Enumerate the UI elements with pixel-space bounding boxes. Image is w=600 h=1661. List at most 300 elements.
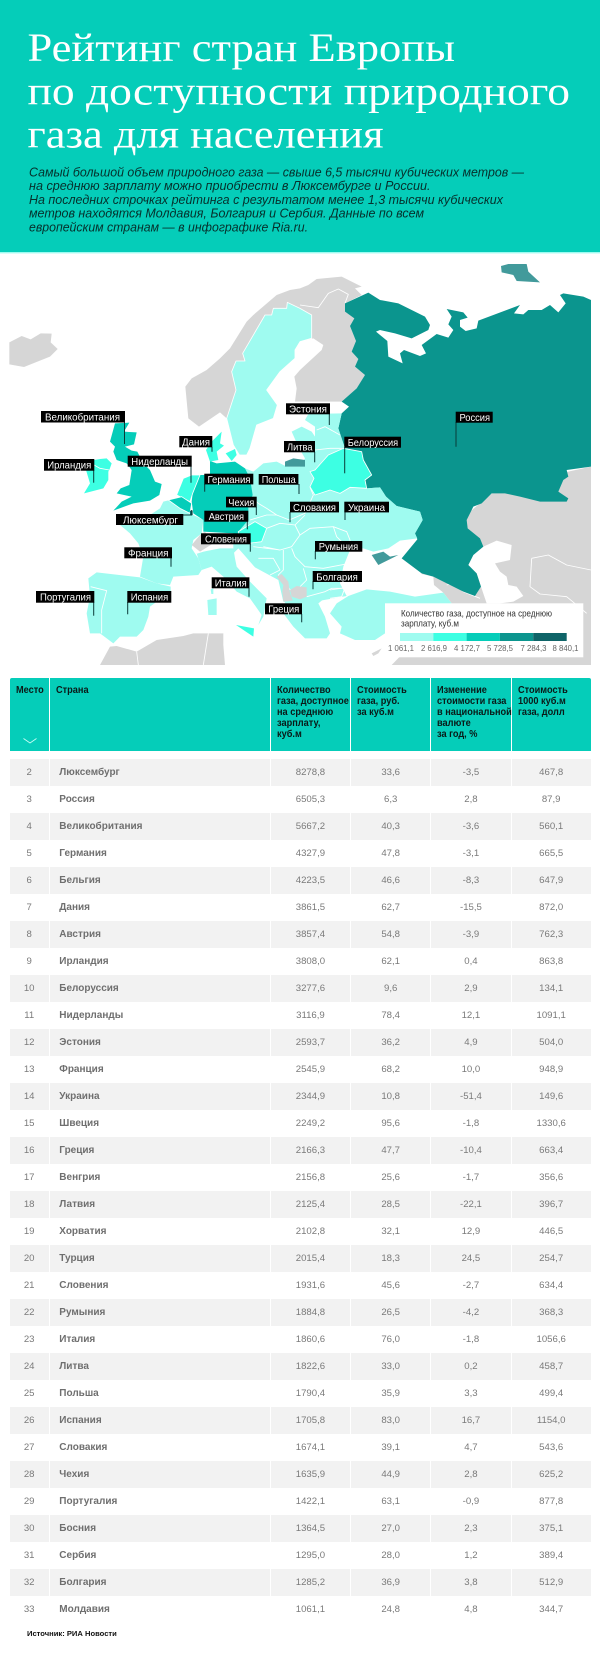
- row: Люксембург: -3,5: [463, 767, 479, 778]
- row: Португалия: 877,8: [539, 1496, 563, 1507]
- row: Ирландия: 0,4: [464, 956, 478, 967]
- row: Молдавия: 33: [24, 1604, 35, 1615]
- row: Швеция: -1,8: [463, 1118, 479, 1129]
- table header: Страна: [56, 684, 88, 696]
- row: Италия: Италия: [59, 1334, 95, 1345]
- row: Россия: 3: [27, 794, 32, 805]
- intro text: [29, 165, 525, 234]
- row: Сербия: 389,4: [539, 1550, 563, 1561]
- row: Сербия: Сербия: [59, 1550, 96, 1561]
- table header: 1000 куб.м: [518, 696, 565, 706]
- row: Хорватия: 2102,8: [296, 1226, 325, 1237]
- row: Польша: 3,3: [464, 1388, 478, 1399]
- table header: Изменение: [437, 684, 487, 696]
- Turkey: [330, 589, 452, 640]
- row: Словения: 634,4: [539, 1280, 563, 1291]
- row: Словения: 21: [24, 1280, 35, 1291]
- label: Россия: [456, 412, 493, 447]
- row: Франция: 10,0: [462, 1064, 480, 1075]
- Caspian Sea: [468, 541, 523, 603]
- row: Италия: 1056,6: [537, 1334, 566, 1345]
- label: Литва: [284, 441, 315, 462]
- row: Белоруссия: 3277,6: [296, 983, 325, 994]
- row: Ирландия: [27, 956, 563, 967]
- row: Россия: 6505,3: [296, 794, 325, 805]
- row: Ирландия: Ирландия: [59, 956, 109, 967]
- row: Литва: 24: [24, 1361, 35, 1372]
- row: Болгария: Болгария: [59, 1577, 106, 1588]
- row: Португалия: 63,1: [381, 1496, 400, 1507]
- row: Хорватия: 446,5: [539, 1226, 563, 1237]
- label: Великобритания: Великобритания: [45, 412, 120, 424]
- row: Болгария: 32: [24, 1577, 35, 1588]
- label: Люксембург: [116, 510, 192, 526]
- Crimea: [372, 552, 398, 565]
- label: Греция: Греция: [268, 605, 299, 616]
- row: Румыния: 1884,8: [296, 1307, 325, 1318]
- row: Молдавия: [24, 1604, 563, 1615]
- row: Португалия: Португалия: [59, 1496, 117, 1507]
- row: Люксембург: 467,8: [539, 767, 563, 778]
- row: Германия: 47,8: [381, 848, 400, 859]
- row: Босния: 2,3: [464, 1523, 478, 1534]
- row: Белоруссия: 134,1: [539, 983, 563, 994]
- row: Польша: 25: [24, 1388, 35, 1399]
- row: Испания: 26: [24, 1415, 35, 1426]
- label: Чехия: Чехия: [228, 498, 254, 509]
- row: Турция: 254,7: [539, 1253, 563, 1264]
- row: Нидерланды: 11: [24, 1010, 34, 1021]
- Spain: [87, 572, 171, 643]
- row: Польша: [24, 1388, 563, 1399]
- row: Молдавия: 24,8: [381, 1604, 400, 1615]
- label: Украина: Украина: [348, 503, 385, 514]
- row: Франция: 2545,9: [296, 1064, 325, 1075]
- row: Португалия: [24, 1496, 563, 1507]
- row: Босния: 27,0: [381, 1523, 400, 1534]
- label: Литва: Литва: [287, 442, 313, 453]
- source note: Источник: РИА Новости: [27, 1629, 117, 1638]
- row: Германия: -3,1: [463, 848, 479, 859]
- row: Эстония: [10, 1029, 591, 1056]
- row: Португалия: 1422,1: [296, 1496, 325, 1507]
- row: Италия: 1860,6: [296, 1334, 325, 1345]
- row: Россия: Россия: [59, 794, 95, 805]
- row: Чехия: 28: [24, 1469, 35, 1480]
- row: Великобритания: -3,6: [463, 821, 479, 832]
- row: Латвия: Латвия: [59, 1199, 95, 1210]
- row: Хорватия: Хорватия: [59, 1226, 106, 1237]
- row: Франция: 68,2: [381, 1064, 400, 1075]
- table header: за год, %: [437, 728, 478, 740]
- row: Литва: Литва: [59, 1361, 89, 1372]
- row: Греция: 16: [24, 1145, 35, 1156]
- row: Словения: 1931,6: [296, 1280, 325, 1291]
- Denmark: [206, 432, 224, 462]
- row: Венгрия: 25,6: [381, 1172, 400, 1183]
- row: Чехия: Чехия: [59, 1469, 89, 1480]
- row: Словакия: 543,6: [539, 1442, 563, 1453]
- row: Греция: Греция: [59, 1145, 94, 1156]
- legend tick values: 7 284,3: [520, 644, 547, 653]
- Belgium: [168, 497, 192, 513]
- label: Болгария: [313, 571, 362, 589]
- row: Венгрия: [24, 1172, 563, 1183]
- row: Россия: 6,3: [384, 794, 397, 805]
- row: Словения: 45,6: [381, 1280, 400, 1291]
- row: Чехия: 1635,9: [296, 1469, 325, 1480]
- row: Хорватия: 32,1: [381, 1226, 400, 1237]
- Norway and Finland: [185, 277, 365, 427]
- row: Португалия: -0,9: [463, 1496, 479, 1507]
- row: Белоруссия: [10, 975, 591, 1002]
- row: Люксембург: [10, 759, 591, 786]
- table rows: [10, 759, 591, 1615]
- row: Польша: Польша: [59, 1388, 99, 1399]
- label: Португалия: Португалия: [40, 593, 91, 604]
- intro text: европейским странам — в инфографике Ria.ru.: [29, 219, 308, 234]
- row: Белоруссия: Белоруссия: [59, 983, 119, 994]
- row: Бельгия: -8,3: [463, 875, 479, 886]
- row: Румыния: [10, 1299, 591, 1326]
- label: Болгария: Болгария: [316, 572, 358, 583]
- Ireland: [84, 458, 112, 493]
- row: Германия: 665,5: [539, 848, 563, 859]
- row: Молдавия: Молдавия: [59, 1604, 110, 1615]
- row: Швеция: 1330,6: [537, 1118, 566, 1129]
- legend: [385, 603, 583, 657]
- table header: валюте: [437, 718, 471, 728]
- row: Люксембург: 2: [27, 767, 32, 778]
- row: Греция: 47,7: [381, 1145, 400, 1156]
- label: Великобритания: [41, 411, 125, 444]
- row: Белоруссия: 10: [24, 983, 35, 994]
- label: Германия: Германия: [208, 475, 250, 486]
- title: газа для населения: [28, 111, 384, 156]
- row: Турция: 24,5: [462, 1253, 480, 1264]
- Belarus: [310, 448, 372, 495]
- table header: на среднюю: [277, 706, 333, 718]
- row: Дания: 62,7: [381, 902, 400, 913]
- row: Чехия: 2,8: [464, 1469, 478, 1480]
- row: Бельгия: 6: [27, 875, 32, 886]
- row: Россия: 2,8: [464, 794, 478, 805]
- row: Венгрия: 356,6: [539, 1172, 563, 1183]
- row: Украина: 10,8: [381, 1091, 400, 1102]
- row: Босния: Босния: [59, 1523, 96, 1534]
- row: Греция: 663,4: [539, 1145, 563, 1156]
- row: Румыния: 26,5: [381, 1307, 400, 1318]
- label: Словения: [201, 533, 251, 552]
- table header: Стоимость: [357, 684, 407, 696]
- table header: зарплату,: [277, 718, 320, 728]
- label: Белоруссия: [344, 437, 401, 473]
- row: Нидерланды: [24, 1010, 566, 1021]
- row: Венгрия: 17: [24, 1172, 35, 1183]
- row: Босния: [10, 1515, 591, 1542]
- label: Австрия: Австрия: [209, 512, 244, 523]
- row: Латвия: 2125,4: [296, 1199, 325, 1210]
- row: Сербия: 1,2: [464, 1550, 478, 1561]
- row: Нидерланды: 1091,1: [537, 1010, 566, 1021]
- row: Австрия: 8: [27, 929, 32, 940]
- row: Ирландия: 863,8: [539, 956, 563, 967]
- row: Италия: 23: [24, 1334, 35, 1345]
- row: Латвия: [10, 1191, 591, 1218]
- row: Венгрия: -1,7: [463, 1172, 479, 1183]
- Cyprus: [372, 648, 382, 656]
- label: Белоруссия: Белоруссия: [348, 438, 398, 449]
- row: Дания: -15,5: [460, 902, 482, 913]
- row: Сербия: 31: [24, 1550, 35, 1561]
- row: Эстония: 12: [24, 1037, 35, 1048]
- table header: в национальной: [437, 706, 512, 718]
- legend tick values: 1 061,1: [388, 644, 414, 653]
- label: Германия: [204, 474, 253, 492]
- row: Венгрия: 2156,8: [296, 1172, 325, 1183]
- intro text: метров находятся Молдавия, Болгария и Сербия. Данные по всем: [29, 206, 424, 221]
- Germany: [192, 461, 253, 535]
- Kaliningrad: [285, 458, 305, 467]
- row: Бельгия: 647,9: [539, 875, 563, 886]
- row: Дания: 3861,5: [296, 902, 325, 913]
- row: Эстония: 4,9: [464, 1037, 478, 1048]
- row: Латвия: -22,1: [460, 1199, 482, 1210]
- row: Швеция: 2249,2: [296, 1118, 325, 1129]
- row: Ирландия: 9: [27, 956, 32, 967]
- row: Эстония: 36,2: [381, 1037, 400, 1048]
- intro text: Самый большой объем природного газа — свыше 6,5 тысячи кубических метров —: [29, 165, 525, 180]
- map of Europe: [9, 264, 591, 665]
- row: Хорватия: 12,9: [462, 1226, 480, 1237]
- row: Болгария: 1285,2: [296, 1577, 325, 1588]
- label: Люксембург: Люксембург: [123, 514, 178, 526]
- Albania and Macedonia: [277, 574, 293, 602]
- row: Австрия: -3,9: [463, 929, 479, 940]
- row: Великобритания: 560,1: [539, 821, 563, 832]
- intro text: на среднюю зарплату можно приобрести в Люксембурге и России.: [29, 178, 430, 193]
- row: Дания: 872,0: [539, 902, 563, 913]
- table header: Место: [16, 684, 43, 696]
- label: Эстония: [286, 403, 330, 425]
- title: Рейтинг стран Европы: [28, 25, 455, 70]
- Luxembourg: [190, 511, 193, 515]
- row: Швеция: 15: [24, 1118, 35, 1129]
- row: Люксембург: Люксембург: [59, 767, 120, 778]
- legend colour scale: [400, 633, 567, 641]
- legend title: Количество газа, доступное на среднюю: [401, 609, 552, 619]
- table header: за куб.м: [357, 706, 394, 718]
- row: Нидерланды: Нидерланды: [59, 1010, 123, 1021]
- row: Люксембург: 33,6: [381, 767, 400, 778]
- row: Ирландия: 3808,0: [296, 956, 325, 967]
- legend tick values: 2 616,9: [421, 644, 447, 653]
- table header: газа, руб.: [357, 696, 400, 706]
- row: Испания: 16,7: [462, 1415, 480, 1426]
- label: Греция: [265, 603, 302, 622]
- label: Испания: [127, 591, 171, 614]
- row: Франция: 13: [24, 1064, 35, 1075]
- Greece: [283, 597, 330, 638]
- row: Германия: 5: [27, 848, 32, 859]
- row: Бельгия: Бельгия: [59, 875, 101, 886]
- label: Польша: [259, 474, 299, 494]
- row: Сербия: [24, 1550, 563, 1561]
- Kazakhstan and Caucasus: [392, 467, 591, 665]
- row: Дания: 7: [27, 902, 32, 913]
- row: Польша: 1790,4: [296, 1388, 325, 1399]
- row: Россия: 87,9: [542, 794, 561, 805]
- Switzerland: [192, 532, 213, 552]
- label: Дания: Дания: [182, 437, 210, 448]
- row: Молдавия: 4,8: [464, 1604, 478, 1615]
- row: Швеция: [24, 1118, 566, 1129]
- row: Турция: 18,3: [381, 1253, 400, 1264]
- row: Эстония: 504,0: [539, 1037, 563, 1048]
- label: Италия: [212, 577, 249, 597]
- row: Словения: -2,7: [463, 1280, 479, 1291]
- row: Люксембург: 8278,8: [296, 767, 325, 778]
- row: Италия: [24, 1334, 566, 1345]
- row: Румыния: 22: [24, 1307, 35, 1318]
- row: Украина: Украина: [59, 1091, 100, 1102]
- table header: стоимости газа: [437, 696, 507, 706]
- row: Австрия: 762,3: [539, 929, 563, 940]
- label: Нидерланды: Нидерланды: [131, 457, 188, 468]
- table header: Стоимость: [518, 684, 567, 696]
- row: Австрия: 54,8: [381, 929, 400, 940]
- row: Чехия: 44,9: [381, 1469, 400, 1480]
- row: Литва: 33,0: [381, 1361, 400, 1372]
- row: Бельгия: [10, 867, 591, 894]
- legend tick values: 5 728,5: [487, 644, 514, 653]
- row: Турция: Турция: [59, 1253, 95, 1264]
- table header: Количество: [277, 684, 330, 696]
- row: Дания: [27, 902, 563, 913]
- row: Турция: 2015,4: [296, 1253, 325, 1264]
- row: Великобритания: Великобритания: [59, 821, 142, 832]
- label: Франция: [124, 547, 172, 567]
- row: Украина: 149,6: [539, 1091, 563, 1102]
- row: Австрия: [10, 921, 591, 948]
- row: Молдавия: 1061,1: [296, 1604, 325, 1615]
- row: Босния: 375,1: [539, 1523, 563, 1534]
- row: Чехия: [10, 1461, 591, 1488]
- title: по доступности природного: [28, 68, 570, 113]
- row: Сербия: 28,0: [381, 1550, 400, 1561]
- Hungary patch: [238, 522, 267, 543]
- row: Украина: [10, 1083, 591, 1110]
- row: Испания: 83,0: [381, 1415, 400, 1426]
- row: Сербия: 1295,0: [296, 1550, 325, 1561]
- label: Эстония: Эстония: [289, 405, 327, 416]
- intro text: На последних строчках рейтинга с результатом менее 1,3 тысячи кубических: [29, 192, 503, 207]
- label: Португалия: [36, 591, 94, 616]
- row: Греция: -10,4: [460, 1145, 482, 1156]
- table header: газа, долл: [518, 706, 564, 718]
- row: Испания: Испания: [59, 1415, 102, 1426]
- row: Эстония: Эстония: [59, 1037, 101, 1048]
- row: Словения: Словения: [59, 1280, 108, 1291]
- label: Италия: Италия: [215, 579, 247, 590]
- legend tick values: 8 840,1: [552, 644, 579, 653]
- row: Литва: [10, 1353, 591, 1380]
- label: Ирландия: [44, 459, 94, 483]
- table header: газа, доступное: [277, 696, 349, 706]
- label: Дания: [179, 436, 212, 452]
- Novaya Zemlya: [501, 264, 540, 282]
- row: Россия: [27, 794, 561, 805]
- row: Латвия: 396,7: [539, 1199, 563, 1210]
- label: Румыния: [315, 541, 362, 559]
- row: Украина: -51,4: [460, 1091, 482, 1102]
- label: Австрия: [204, 511, 248, 529]
- row: Дания: Дания: [59, 902, 90, 913]
- row: Франция: Франция: [59, 1064, 104, 1075]
- row: Турция: 20: [24, 1253, 35, 1264]
- row: Словакия: 4,7: [464, 1442, 478, 1453]
- row: Испания: 1154,0: [537, 1415, 566, 1426]
- row: Босния: 1364,5: [296, 1523, 325, 1534]
- Netherlands: [177, 475, 200, 502]
- row: Франция: 948,9: [539, 1064, 563, 1075]
- row: Швеция: Швеция: [59, 1118, 99, 1129]
- row: Германия: 4327,9: [296, 848, 325, 859]
- table header: [10, 678, 591, 751]
- Eastern Europe: [233, 413, 423, 603]
- label: Польша: Польша: [262, 475, 296, 486]
- legend title: [401, 609, 552, 629]
- row: Италия: -1,8: [463, 1334, 479, 1345]
- row: Турция: [10, 1245, 591, 1272]
- row: Хорватия: 19: [24, 1226, 35, 1237]
- row: Эстония: 2593,7: [296, 1037, 325, 1048]
- row: Болгария: [10, 1569, 591, 1596]
- label: Чехия: [226, 497, 257, 515]
- row: Литва: 1822,6: [296, 1361, 325, 1372]
- row: Болгария: 512,9: [539, 1577, 563, 1588]
- row: Греция: 2166,3: [296, 1145, 325, 1156]
- row: Нидерланды: 3116,9: [296, 1010, 325, 1021]
- row: Латвия: 28,5: [381, 1199, 400, 1210]
- row: Литва: 0,2: [464, 1361, 478, 1372]
- row: Великобритания: [10, 813, 591, 840]
- row: Украина: 14: [24, 1091, 35, 1102]
- row: Молдавия: 344,7: [539, 1604, 563, 1615]
- Russia: [338, 293, 591, 596]
- row: Румыния: -4,2: [463, 1307, 479, 1318]
- row: Словакия: [24, 1442, 563, 1453]
- label: Украина: [344, 502, 389, 520]
- label: Словакия: Словакия: [293, 503, 336, 514]
- row: Словакия: 39,1: [381, 1442, 400, 1453]
- row: Греция: [10, 1137, 591, 1164]
- label: Словения: Словения: [205, 535, 247, 546]
- row: Германия: [26, 848, 563, 859]
- row: Ирландия: 62,1: [381, 956, 400, 967]
- row: Великобритания: 5667,2: [296, 821, 325, 832]
- row: Великобритания: 4: [27, 821, 32, 832]
- table header: куб.м: [277, 728, 301, 740]
- row: Босния: 30: [24, 1523, 35, 1534]
- row: Италия: 76,0: [381, 1334, 400, 1345]
- row: Нидерланды: 78,4: [381, 1010, 400, 1021]
- row: Бельгия: 4223,5: [296, 875, 325, 886]
- row: Венгрия: Венгрия: [59, 1172, 100, 1183]
- row: Чехия: 625,2: [539, 1469, 563, 1480]
- row: Нидерланды: 12,1: [462, 1010, 480, 1021]
- row: Словакия: 27: [24, 1442, 35, 1453]
